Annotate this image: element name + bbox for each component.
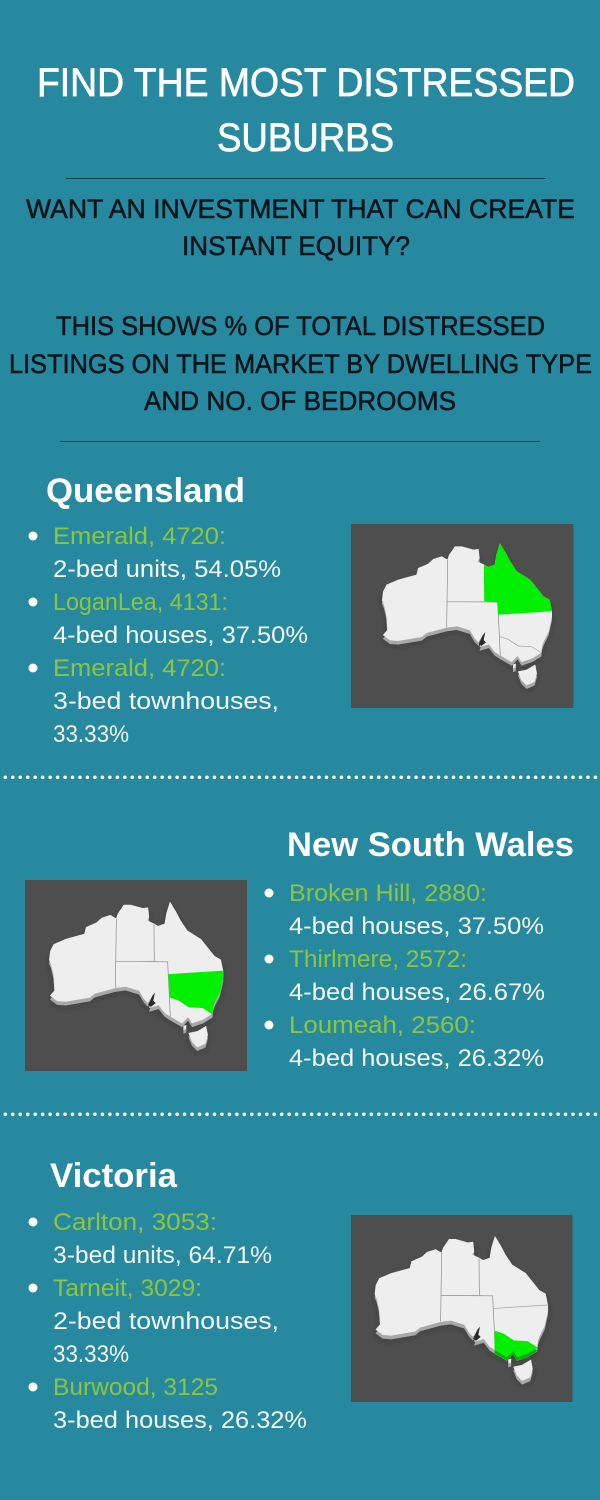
list: Victoria suburbs: 33.33%	[53, 1341, 129, 1368]
list: Victoria suburbs: Carlton, 3053:	[53, 1209, 217, 1236]
title: FIND THE MOST DISTRESSED	[37, 61, 575, 105]
heading: Queensland: Queensland	[46, 472, 245, 510]
list: Queensland suburbs	[28, 523, 308, 748]
subtitle question	[26, 194, 575, 261]
panel: Victoria	[28, 1157, 572, 1434]
title: SUBURBS	[217, 116, 394, 160]
list: Queensland suburbs: LoganLea, 4131:	[53, 589, 228, 616]
list: Victoria suburbs	[28, 1209, 307, 1434]
subtitle question: INSTANT EQUITY?	[182, 231, 410, 261]
list: New South Wales suburbs: Thirlmere, 2572:	[289, 946, 467, 973]
subtitle question: WANT AN INVESTMENT THAT CAN CREATE	[26, 194, 575, 224]
list: Queensland suburbs: 4-bed houses, 37.50%	[53, 622, 308, 649]
panel: Queensland	[28, 472, 574, 748]
map: Queensland highlighted	[351, 524, 574, 708]
list: New South Wales suburbs: Loumeah, 2560:	[289, 1012, 476, 1039]
list: Queensland suburbs: Emerald, 4720:	[53, 655, 226, 682]
list: New South Wales suburbs: Broken Hill, 2880:	[289, 880, 487, 907]
list: Queensland suburbs: Emerald, 4720:	[53, 523, 226, 550]
heading: New South Wales: New South Wales	[287, 826, 574, 864]
list: New South Wales suburbs: 4-bed houses, 26.32%	[289, 1045, 544, 1072]
explanation text: THIS SHOWS % OF TOTAL DISTRESSED	[56, 311, 545, 341]
panel: New South Wales	[25, 826, 574, 1072]
map: New South Wales highlighted	[25, 880, 247, 1071]
list: Queensland suburbs: 33.33%	[53, 721, 129, 748]
list: New South Wales suburbs	[264, 880, 545, 1072]
list: Queensland suburbs: 2-bed units, 54.05%	[53, 556, 281, 583]
list: Victoria suburbs: 3-bed houses, 26.32%	[53, 1407, 307, 1434]
list: New South Wales suburbs: 4-bed houses, 26.67%	[289, 979, 545, 1006]
heading: Victoria: Victoria	[50, 1157, 178, 1195]
explanation text	[9, 311, 592, 416]
list: Victoria suburbs: 2-bed townhouses,	[53, 1308, 279, 1335]
list: Victoria suburbs: Burwood, 3125	[53, 1374, 218, 1401]
map: Victoria highlighted	[351, 1215, 572, 1402]
list: New South Wales suburbs: 4-bed houses, 37.50%	[289, 913, 544, 940]
list: Victoria suburbs: Tarneit, 3029:	[53, 1275, 202, 1302]
divider: dotted	[5, 775, 600, 779]
list: Queensland suburbs: 3-bed townhouses,	[53, 688, 279, 715]
explanation text: AND NO. OF BEDROOMS	[144, 386, 456, 416]
title	[37, 61, 575, 160]
list: Victoria suburbs: 3-bed units, 64.71%	[53, 1242, 272, 1269]
divider: dotted	[5, 1113, 600, 1116]
